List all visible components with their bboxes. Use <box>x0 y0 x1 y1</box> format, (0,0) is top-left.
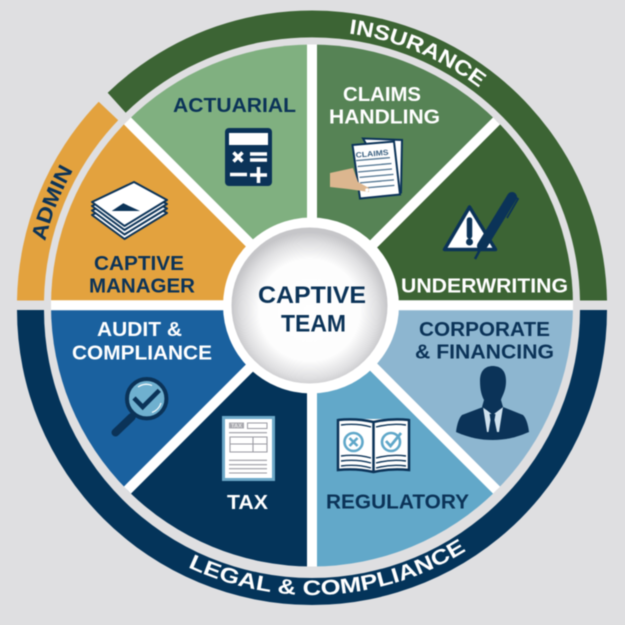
label: audit and compliance <box>72 319 212 364</box>
label: captive manager <box>89 253 196 298</box>
icon: tax form <box>224 418 274 480</box>
outer ring: legal and compliance: LEGAL & COMPLIANCE <box>188 538 466 596</box>
outer ring: admin <box>16 101 119 302</box>
label: actuarial: ACTUARIAL <box>173 95 296 117</box>
icon: stack of papers <box>92 182 167 239</box>
outer ring: insurance: INSURANCE <box>350 18 488 88</box>
icon: claims papers and hand <box>330 138 402 198</box>
wedge: actuarial <box>127 44 312 305</box>
label: corporate and financing: CORPORATE <box>419 319 550 341</box>
wedge: claims handling <box>312 44 497 305</box>
icon: tax form: TAX <box>231 424 243 430</box>
label: claims handling: CLAIMS <box>343 84 421 106</box>
center hub: captive team <box>223 218 399 394</box>
label: captive team <box>258 282 366 338</box>
wedge: regulatory <box>312 306 497 566</box>
outer ring: admin: ADMIN <box>32 164 73 242</box>
icon: calculator <box>225 128 272 186</box>
icon: open book <box>338 419 409 472</box>
icon: claims papers and hand: CLAIMS <box>355 148 389 160</box>
icon: magnifier with check <box>116 379 166 432</box>
wedge: audit and compliance <box>51 306 312 490</box>
label: captive team: TEAM <box>281 310 346 338</box>
label: regulatory: REGULATORY <box>326 492 470 514</box>
icon: warning triangle and pen <box>444 196 518 259</box>
label: audit and compliance: AUDIT & <box>97 319 182 341</box>
wedge: tax <box>127 306 312 566</box>
wedge: corporate and financing <box>312 306 573 490</box>
label: tax: TAX <box>227 492 269 514</box>
label: underwriting: UNDERWRITING <box>401 276 568 298</box>
icon: businessman <box>456 366 529 440</box>
wedge: underwriting <box>312 121 573 306</box>
label: corporate and financing: & FINANCING <box>415 342 554 364</box>
label: captive manager: CAPTIVE <box>94 253 184 275</box>
label: corporate and financing <box>415 319 554 364</box>
label: claims handling <box>329 84 440 128</box>
label: claims handling: HANDLING <box>329 106 440 128</box>
label: captive team: CAPTIVE <box>258 282 366 309</box>
label: audit and compliance: COMPLIANCE <box>72 342 212 364</box>
wedge: captive manager <box>51 121 312 306</box>
label: captive manager: MANAGER <box>89 276 196 298</box>
